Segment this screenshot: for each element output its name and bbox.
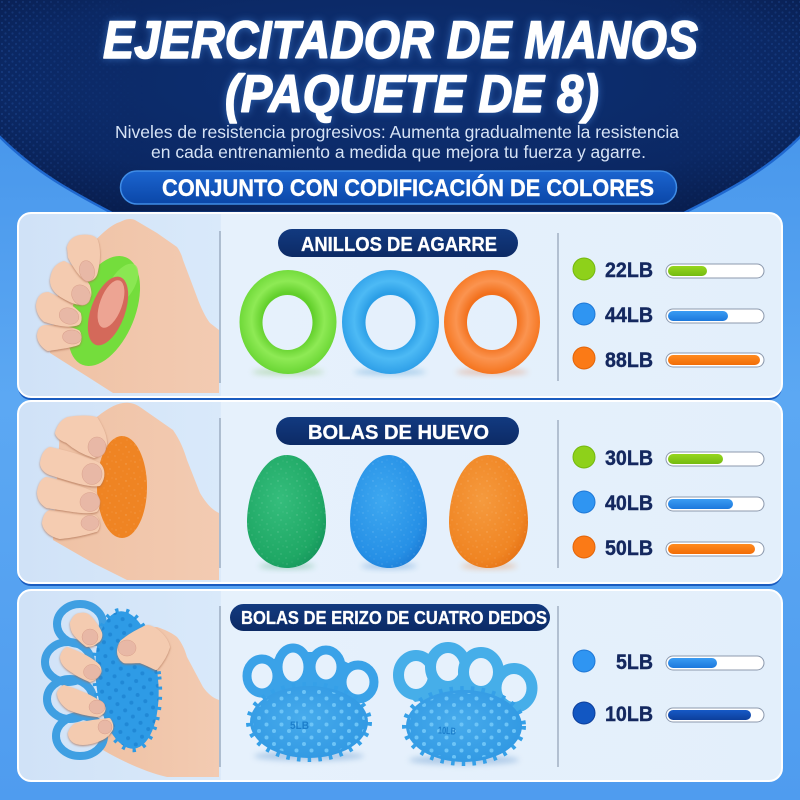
spiky ball 10LB (398, 648, 532, 765)
level 40LB (573, 491, 764, 515)
title: (PAQUETE DE 8) (225, 65, 599, 124)
blue egg (350, 455, 427, 569)
hand gripping green ring (38, 219, 219, 393)
panel: four-finger hedgehog balls (18, 590, 782, 781)
panel: egg balls (18, 401, 782, 586)
heading: hedgehog balls: BOLAS DE ERIZO DE CUATRO DEDOS (241, 608, 547, 628)
level 22LB (573, 258, 764, 282)
level 5LB (573, 650, 764, 674)
level 40LB: 40LB (605, 492, 653, 515)
level 30LB: 30LB (605, 447, 653, 470)
heading: grip rings (278, 229, 518, 257)
level 22LB: 22LB (605, 259, 653, 282)
heading: grip rings: ANILLOS DE AGARRE (301, 234, 497, 256)
orange ring (444, 270, 540, 375)
level 30LB (573, 446, 764, 470)
title: (PAQUETE DE 8) (225, 65, 599, 124)
heading: hedgehog balls (230, 604, 550, 631)
subtitle (115, 122, 679, 162)
hand squeezing orange egg (39, 403, 219, 580)
heading: egg balls: BOLAS DE HUEVO (308, 422, 489, 444)
level 88LB: 88LB (605, 349, 653, 372)
level 88LB (573, 347, 764, 372)
level 44LB: 44LB (605, 304, 653, 327)
orange egg (449, 455, 528, 569)
level 10LB: 10LB (605, 703, 653, 726)
banner: color coded set: CONJUNTO CON CODIFICACIÓN DE COLORES (162, 174, 654, 202)
panel: grip rings (18, 213, 782, 400)
subtitle: Niveles de resistencia progresivos: Aumenta gradualmente la resistencia (115, 122, 679, 142)
green egg (247, 455, 326, 569)
title: EJERCITADOR DE MANOS (103, 11, 698, 70)
hand squeezing spiky ball (45, 604, 219, 777)
green ring (240, 270, 336, 375)
subtitle: en cada entrenamiento a medida que mejora tu fuerza y agarre. (151, 142, 646, 162)
level 5LB: 5LB (616, 651, 653, 674)
title: EJERCITADOR DE MANOS (103, 11, 698, 70)
level 44LB (573, 303, 764, 327)
background (0, 0, 800, 552)
spiky ball 5LB (247, 648, 374, 761)
level 50LB (573, 536, 764, 560)
spiky ball 10LB: 10LB (438, 725, 456, 738)
heading: egg balls (276, 417, 519, 445)
blue ring (342, 270, 439, 375)
title (103, 11, 698, 124)
spiky ball 5LB: 5LB (290, 720, 309, 732)
level 50LB: 50LB (605, 537, 653, 560)
level 10LB (573, 702, 764, 726)
